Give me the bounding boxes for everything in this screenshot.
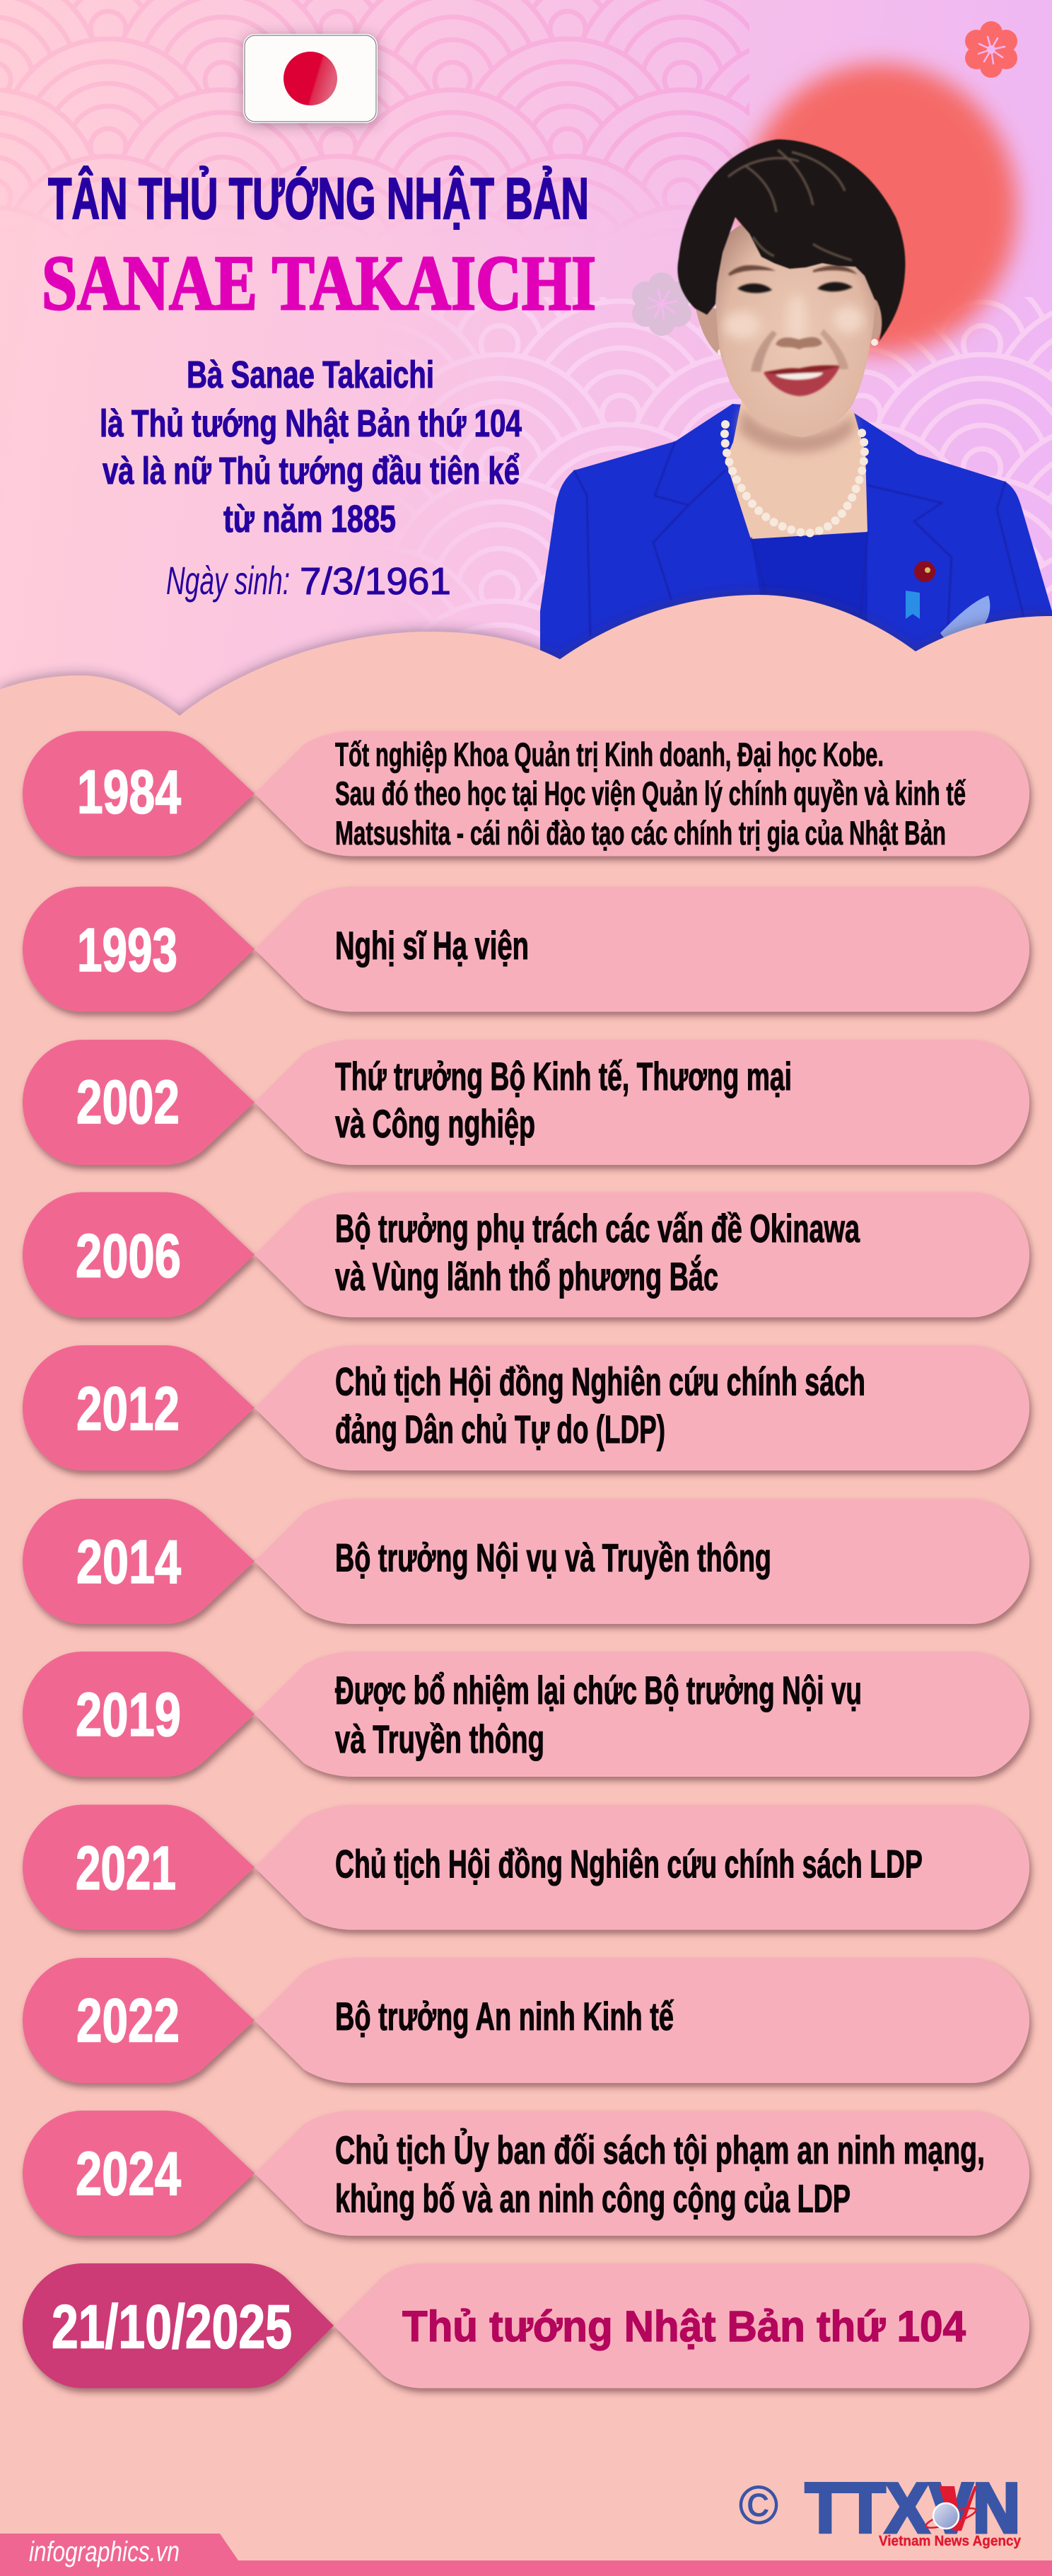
intro text block: Bà Sanae Takaichi	[187, 354, 434, 396]
description 2024	[255, 2111, 1029, 2236]
timeline row: 2002	[23, 1040, 1029, 1165]
short dark hair	[677, 139, 905, 342]
description 2012	[255, 1345, 1029, 1470]
timeline row: 21/10/2025	[23, 2263, 1029, 2388]
description 2014	[255, 1499, 1029, 1624]
peach cloud body	[0, 595, 1052, 2576]
intro text block: từ năm 1885	[223, 498, 396, 540]
year badge 2002: 2002	[76, 1068, 180, 1137]
year badge 2019	[23, 1652, 255, 1777]
description 2012: đảng Dân chủ Tự do (LDP)	[335, 1407, 665, 1451]
year badge 1984: 1984	[77, 758, 181, 826]
description 2022: Bộ trưởng An ninh Kinh tế	[335, 1994, 674, 2038]
final appointment pill: Thủ tướng Nhật Bản thứ 104	[402, 2302, 966, 2350]
description 2019: và Truyền thông	[335, 1717, 544, 1761]
year badge 2021: 2021	[76, 1834, 176, 1903]
neck	[725, 396, 867, 539]
TTXVN logo: Vietnam News Agency	[879, 2534, 1022, 2549]
year badge 2022: 2022	[76, 1987, 180, 2055]
year badge 1984	[23, 731, 255, 856]
date of birth: 7/3/1961	[300, 560, 451, 603]
description 1993: Nghị sĩ Hạ viện	[335, 923, 529, 968]
intro text block: và là nữ Thủ tướng đầu tiên kể	[103, 450, 520, 492]
timeline row: 2006	[23, 1193, 1029, 1317]
intro text block	[100, 354, 522, 540]
lapel pin, ribbon and pocket square	[906, 561, 990, 647]
year badge 2002	[23, 1040, 255, 1165]
description 1984	[255, 731, 1029, 856]
description 2002: Thứ trưởng Bộ Kinh tế, Thương mại	[335, 1054, 792, 1098]
year badge 1993	[23, 887, 255, 1011]
year badge 2014	[23, 1499, 255, 1624]
TTXVN logo: TTXVN	[805, 2468, 1020, 2547]
description 2019	[255, 1652, 1029, 1777]
description 2006: và Vùng lãnh thổ phương Bắc	[335, 1254, 718, 1299]
background gradient	[0, 0, 1052, 778]
date badge	[23, 2263, 334, 2388]
portrait of Sanae Takaichi	[540, 139, 1052, 672]
icon: pale blossom	[632, 272, 691, 336]
description 2021	[255, 1805, 1029, 1930]
timeline row: 1984	[23, 731, 1029, 856]
timeline row: 2021	[23, 1805, 1029, 1930]
Japanese flag	[243, 34, 378, 123]
year badge 2014: 2014	[76, 1528, 181, 1596]
year badge 2024: 2024	[76, 2140, 181, 2208]
description 2014: Bộ trưởng Nội vụ và Truyền thông	[335, 1536, 771, 1580]
blue blazer	[540, 404, 1052, 668]
footer band	[0, 2534, 1052, 2576]
year badge 2006	[23, 1193, 255, 1317]
year badge 2006: 2006	[76, 1222, 181, 1290]
year badge 1993: 1993	[77, 916, 177, 985]
intro text block: là Thủ tướng Nhật Bản thứ 104	[100, 402, 522, 445]
timeline row: 2024	[23, 2111, 1029, 2236]
final appointment pill	[334, 2263, 1029, 2388]
description 2022	[255, 1958, 1029, 2083]
date of birth: Ngày sinh:	[166, 558, 290, 603]
description 2002: và Công nghiệp	[335, 1101, 535, 1146]
year badge 2012: 2012	[76, 1375, 180, 1444]
ears and earrings	[695, 288, 893, 357]
name heading: SANAE TAKAICHI	[42, 240, 596, 326]
description 2006	[255, 1193, 1029, 1317]
year badge 2012	[23, 1345, 255, 1470]
background wave pattern: upper left	[0, 0, 749, 208]
icon: coral blossom	[965, 21, 1017, 78]
timeline row: 1993	[23, 887, 1029, 1011]
year badge 2024	[23, 2111, 255, 2236]
timeline row: 2014	[23, 1499, 1029, 1624]
date of birth	[166, 558, 451, 603]
face	[716, 216, 875, 437]
background wave pattern: lower right	[455, 297, 1052, 638]
copyright symbol: ©	[739, 2476, 778, 2536]
description 2002	[255, 1040, 1029, 1165]
pearl necklace	[725, 424, 865, 533]
year badge 2022	[23, 1958, 255, 2083]
year badge 2021	[23, 1805, 255, 1930]
red sun	[743, 64, 1017, 354]
timeline row: 2022	[23, 1958, 1029, 2083]
facial features	[724, 265, 864, 396]
lapel lines	[574, 441, 1025, 637]
date badge: 21/10/2025	[52, 2293, 292, 2361]
year badge 2019: 2019	[76, 1681, 181, 1749]
blue dress	[751, 530, 867, 672]
description 1993	[255, 887, 1029, 1011]
title: TÂN THỦ TƯỚNG NHẬT BẢN	[48, 165, 589, 231]
timeline row: 2019	[23, 1652, 1029, 1777]
website credit: infographics.vn	[29, 2536, 180, 2568]
timeline row: 2012	[23, 1345, 1029, 1470]
